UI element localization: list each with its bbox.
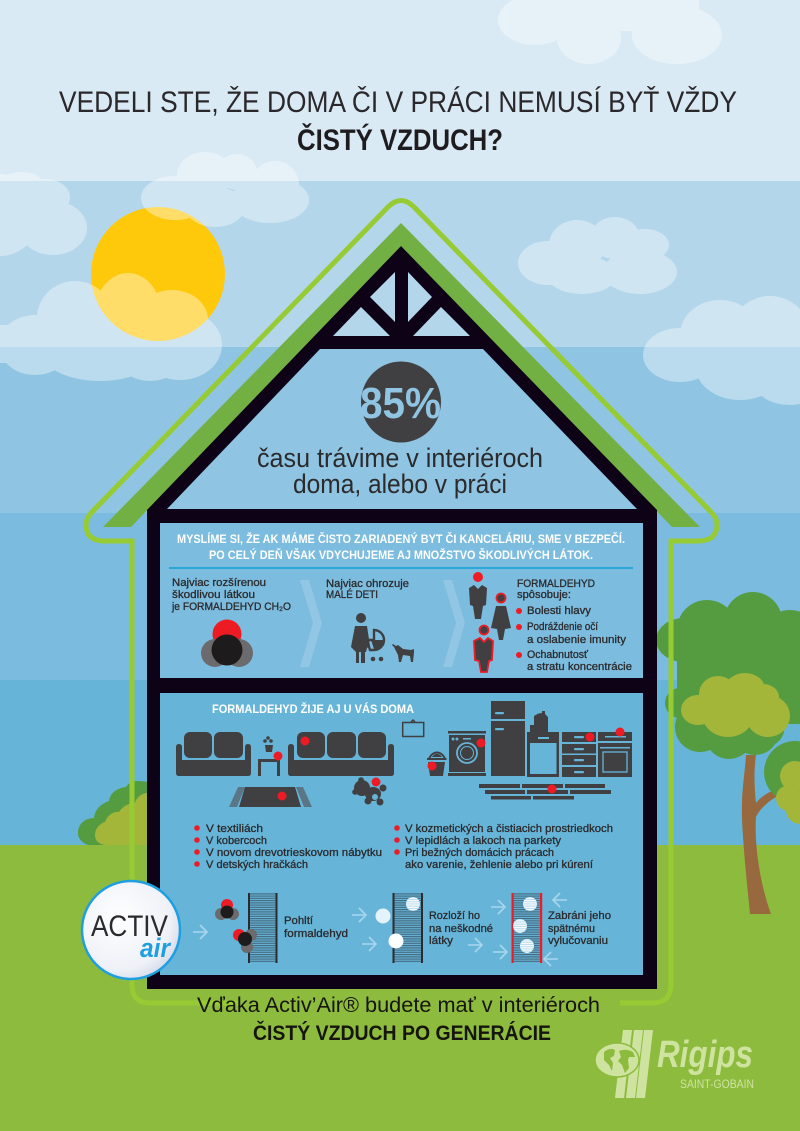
arrows: air flow — [193, 893, 567, 966]
fridge — [491, 701, 525, 776]
closing text: Vďaka Activ’Air® budete mať v interiéroch — [197, 994, 600, 1017]
step text: formaldehyd — [284, 928, 348, 940]
list: formaldehyde effects: a oslabenie imunity — [527, 634, 627, 646]
chevrons — [300, 580, 465, 667]
step text — [548, 910, 611, 947]
house outline: light green — [86, 200, 717, 1003]
side table with vase — [258, 736, 280, 776]
list: where formaldehyde is found, left: V detských hračkách — [206, 859, 308, 871]
text: most common pollutant: škodlivou látkou — [172, 589, 255, 601]
list: formaldehyde effects: a stratu koncentrácie — [527, 661, 632, 673]
text: small children — [326, 578, 409, 601]
85 percent badge: 85% — [360, 379, 441, 428]
sofa: two seats — [176, 732, 251, 776]
badge: Activ Air: air — [140, 933, 171, 963]
title: ČISTÝ VZDUCH? — [297, 123, 503, 157]
list: where formaldehyde is found, left — [194, 823, 382, 871]
step text: Rozloží ho — [429, 910, 480, 922]
kettle — [530, 711, 548, 732]
attic text: času trávime v interiéroch — [257, 443, 543, 473]
logo: Rigips Saint-Gobain: Rigips — [657, 1034, 753, 1076]
list: formaldehyde effects: Ochabnutosť — [527, 649, 589, 661]
icon: mother with stroller and dog — [351, 613, 414, 663]
step text: látky — [429, 935, 454, 947]
roof: green band — [103, 223, 700, 527]
list: where formaldehyde is found, left: V novom drevotrieskovom nábytku — [206, 847, 382, 859]
floor planks — [479, 784, 611, 800]
list: formaldehyde effects: Bolesti hlavy — [527, 605, 592, 617]
picture frame — [403, 720, 424, 736]
dishwasher — [527, 732, 559, 777]
left bush — [78, 781, 147, 845]
washing machine — [448, 731, 486, 776]
list: where formaldehyde is found, left: V kobercoch — [206, 835, 267, 847]
logo stripes — [615, 1030, 653, 1098]
icon: three people — [469, 572, 511, 672]
title — [59, 85, 737, 157]
text: small children: MALÉ DETI — [326, 588, 378, 601]
illustration: living room and kitchen — [176, 701, 632, 807]
badge: Activ Air — [82, 881, 180, 979]
text: most common pollutant: je FORMALDEHYD CH₂O — [171, 601, 291, 613]
panel heading: PO CELÝ DEŇ VŠAK VDYCHUJEME AJ MNOŽSTVO ŠKODLIVÝCH LÁTOK. — [209, 547, 593, 562]
molecule one — [215, 899, 239, 920]
closing text: ČISTÝ VZDUCH PO GENERÁCIE — [253, 1021, 551, 1045]
text: small children: Najviac ohrozuje — [326, 578, 409, 590]
right tree — [656, 592, 800, 914]
list: formaldehyde effects — [516, 578, 632, 673]
house: dark frame — [147, 246, 657, 989]
oven — [598, 732, 632, 777]
molecule two — [233, 929, 257, 953]
panel heading — [177, 531, 625, 562]
text: most common pollutant: Najviac rozšírenou — [172, 577, 266, 589]
attic text — [257, 443, 543, 499]
rug — [229, 787, 312, 807]
list: formaldehyde effects: Podráždenie očí — [527, 621, 598, 633]
logo globe — [595, 1043, 639, 1077]
panel heading: MYSLÍME SI, ŽE AK MÁME ČISTO ZARIADENÝ BYT ČI KANCELÁRIU, SME V BEZPEČÍ. — [177, 531, 625, 546]
step text: spätnému — [548, 923, 595, 935]
tree foliage — [656, 592, 800, 803]
tree trunk — [742, 755, 782, 914]
panel: upper floor — [160, 523, 643, 678]
step text: Pohltí — [284, 915, 313, 927]
list: where formaldehyde is found, right: Pri bežných domácich prácach — [405, 847, 554, 859]
list: where formaldehyde is found, right — [394, 823, 613, 871]
step text — [284, 915, 348, 940]
attic panel — [167, 349, 637, 509]
step text — [429, 910, 493, 947]
list: where formaldehyde is found, right: V lepidlách a lakoch na parkety — [405, 835, 562, 847]
icon: formaldehyde molecule — [201, 620, 253, 667]
step text: Zabráni jeho — [548, 910, 611, 922]
list: where formaldehyde is found, left: V textiliách — [206, 823, 263, 835]
attic text: doma, alebo v práci — [293, 469, 507, 499]
closing text — [197, 994, 600, 1045]
list: formaldehyde effects: spôsobuje: — [517, 589, 571, 601]
panel: ground floor — [160, 693, 643, 975]
sun — [91, 207, 225, 341]
list: where formaldehyde is found, right: ako varenie, žehlenie alebo pri kúrení — [405, 859, 593, 871]
diagram: filter step 1 absorb — [215, 893, 348, 963]
diagram: filter step 3 prevent release — [512, 893, 611, 963]
text: most common pollutant — [171, 577, 291, 613]
step text: vylučovaniu — [548, 935, 608, 947]
sofa: three seats — [288, 732, 394, 776]
red pollution dots — [274, 728, 624, 800]
logo: Rigips Saint-Gobain: SAINT-GOBAIN — [680, 1077, 754, 1091]
85 percent badge — [360, 362, 441, 442]
panel heading: FORMALDEHYD ŽIJE AJ U VÁS DOMA — [212, 701, 414, 716]
logo: Rigips Saint-Gobain — [595, 1030, 754, 1098]
list: where formaldehyde is found, right: V kozmetických a čistiacich prostriedkoch — [405, 823, 613, 835]
teddy bear — [352, 777, 386, 806]
clouds — [0, 0, 800, 405]
list: formaldehyde effects: FORMALDEHYD — [517, 578, 595, 590]
step text: na neškodné — [429, 923, 493, 935]
tree lime highlights — [681, 673, 800, 824]
roof truss windows — [333, 272, 470, 336]
bucket — [427, 752, 446, 776]
diagram: filter step 2 break down — [376, 893, 493, 963]
badge: Activ Air: ACTIV — [91, 910, 168, 943]
drawers — [562, 732, 596, 777]
